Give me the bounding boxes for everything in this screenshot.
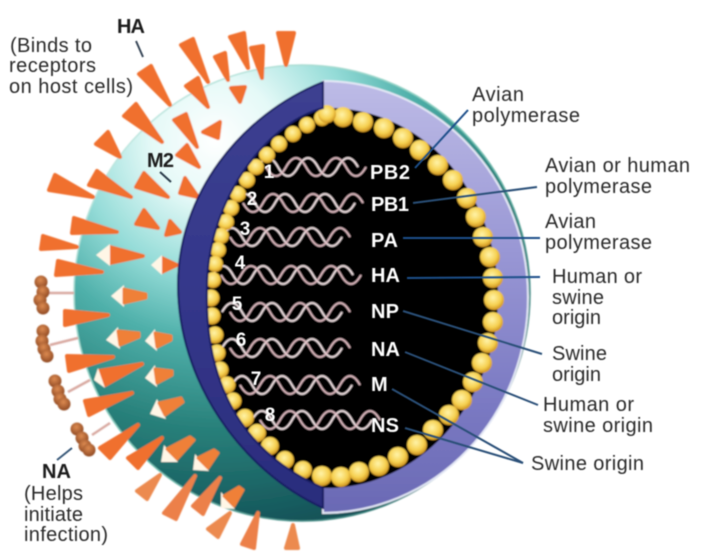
segment numbers — [232, 162, 275, 426]
gene segment names: NA — [371, 339, 400, 361]
line: HA gene — [407, 277, 540, 278]
label: HA: HA — [117, 16, 145, 38]
line: HA leader — [136, 41, 143, 57]
line: M — [392, 389, 523, 463]
segment numbers: 2 — [247, 189, 257, 210]
viral envelope sphere — [74, 65, 530, 521]
text: HA origin: Human or — [552, 266, 642, 288]
line: NS — [405, 428, 523, 463]
text: PA origin — [545, 211, 652, 254]
RNA strands — [213, 158, 380, 429]
text: PB1 origin: Avian or human — [545, 155, 690, 177]
line: NA leader — [57, 448, 72, 460]
gene segment names: PB1 — [371, 194, 409, 216]
segment numbers: 7 — [251, 369, 261, 390]
RNA segment 3 — [222, 228, 350, 246]
gene segment names: NS — [371, 415, 399, 437]
text: HA description — [9, 35, 133, 98]
text: NA description: (Helps — [24, 483, 83, 505]
yellow nucleoprotein beads — [202, 105, 504, 487]
line: PA — [403, 237, 540, 239]
text: NP origin: origin — [552, 364, 601, 386]
RNA segment 5 — [222, 303, 350, 321]
RNA segment 2 — [235, 194, 363, 212]
segment numbers: 4 — [235, 253, 246, 274]
line: PB2 — [415, 110, 468, 168]
label: NA: NA — [42, 461, 71, 483]
text: M and NS origin: Swine origin — [531, 453, 644, 475]
text: PB2 origin: polymerase — [472, 105, 580, 127]
label: M2: M2 — [147, 150, 174, 172]
text: HA origin — [552, 266, 642, 329]
gene segment names — [370, 162, 410, 437]
text: NA description — [24, 483, 108, 546]
text: HA description: (Binds to — [10, 35, 92, 57]
text: PA origin: Avian — [545, 211, 596, 233]
segment numbers: 6 — [236, 330, 246, 351]
segment numbers: 3 — [240, 219, 250, 240]
RNA segment 4 — [213, 266, 361, 284]
RNA segment 1 — [258, 158, 366, 176]
text: PB2 origin — [472, 84, 580, 127]
text: HA origin: swine — [552, 287, 604, 309]
text: HA origin: origin — [552, 307, 601, 329]
text: NA description: initiate — [24, 504, 83, 526]
gene segment names: M — [371, 374, 388, 396]
line: NP — [403, 311, 542, 354]
gene segment names: NP — [371, 301, 399, 323]
segment numbers: 1 — [264, 162, 275, 183]
line: NA gene — [405, 352, 538, 405]
segment numbers: 5 — [232, 294, 243, 315]
text: HA description: on host cells) — [9, 76, 133, 98]
HA surface spikes — [41, 33, 298, 548]
RNA segment 6 — [222, 339, 350, 357]
gene segment names: HA — [371, 265, 400, 287]
text: NP origin: Swine — [552, 343, 607, 365]
line: M2 leader — [160, 172, 171, 182]
text: PB2 origin: Avian — [472, 84, 524, 106]
virus artwork — [34, 33, 530, 548]
RNA segment 8 — [252, 411, 380, 429]
text: PB1 origin: polymerase — [545, 176, 652, 198]
leader lines — [57, 41, 542, 463]
RNA segment 7 — [232, 376, 360, 394]
text: PA origin: polymerase — [545, 232, 652, 254]
segment numbers: 8 — [265, 405, 275, 426]
cut-away purple shell — [323, 81, 528, 513]
text: NA origin: Human or — [543, 394, 634, 416]
text: PB1 origin — [545, 155, 690, 198]
text: NA description: infection) — [24, 524, 108, 546]
dark blue cut-away shell crescent — [178, 82, 323, 508]
gene segment names: PA — [371, 230, 398, 252]
gene segment names: PB2 — [370, 162, 410, 184]
text: NP origin — [552, 343, 607, 386]
text: HA description: receptors — [9, 55, 96, 77]
text: NA origin: swine origin — [543, 415, 653, 437]
text: NA origin — [543, 394, 653, 437]
line: PB1 — [413, 187, 537, 203]
black viral core — [207, 108, 498, 488]
NA surface proteins — [34, 276, 110, 456]
white-tipped spikes on the sphere face — [94, 244, 243, 509]
